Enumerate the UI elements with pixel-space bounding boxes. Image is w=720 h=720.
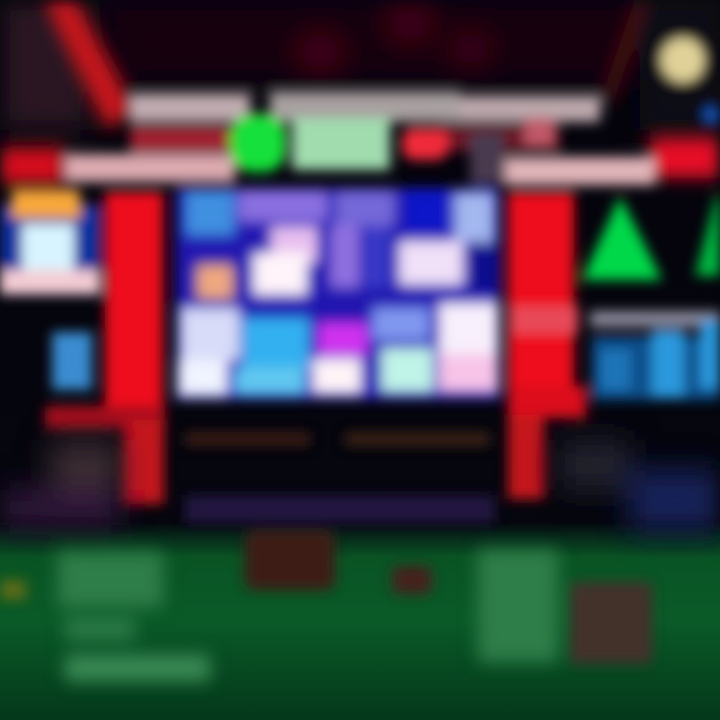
- red diagonal beams: [0, 0, 720, 184]
- text block: lower left: [58, 552, 210, 681]
- title: [65, 92, 655, 185]
- table rows below the screen: [185, 432, 495, 523]
- lower side panels: [0, 440, 720, 530]
- panel: left card: [0, 190, 100, 390]
- icon: moon: [661, 38, 705, 82]
- icon: green tree left: [582, 196, 662, 280]
- title highlight blocks: [230, 114, 554, 184]
- icon: brown crate left: [245, 530, 335, 590]
- icon: brown crate center: [392, 566, 432, 594]
- icon: green tree right: [695, 196, 720, 276]
- right card blue columns: [592, 320, 720, 400]
- icon: brown crate right: [570, 582, 652, 664]
- panel: right card: [582, 196, 720, 400]
- text block: lower right: [478, 550, 558, 662]
- right card text band: [590, 311, 720, 327]
- red pillar: right: [508, 192, 586, 499]
- icon: blue spark: [704, 107, 720, 123]
- panel: central screen: [176, 188, 499, 400]
- icon: small gold marker: [0, 580, 26, 600]
- screen tiles: [178, 190, 498, 396]
- red pillar: left: [45, 192, 165, 504]
- top dark ceiling: [0, 0, 720, 130]
